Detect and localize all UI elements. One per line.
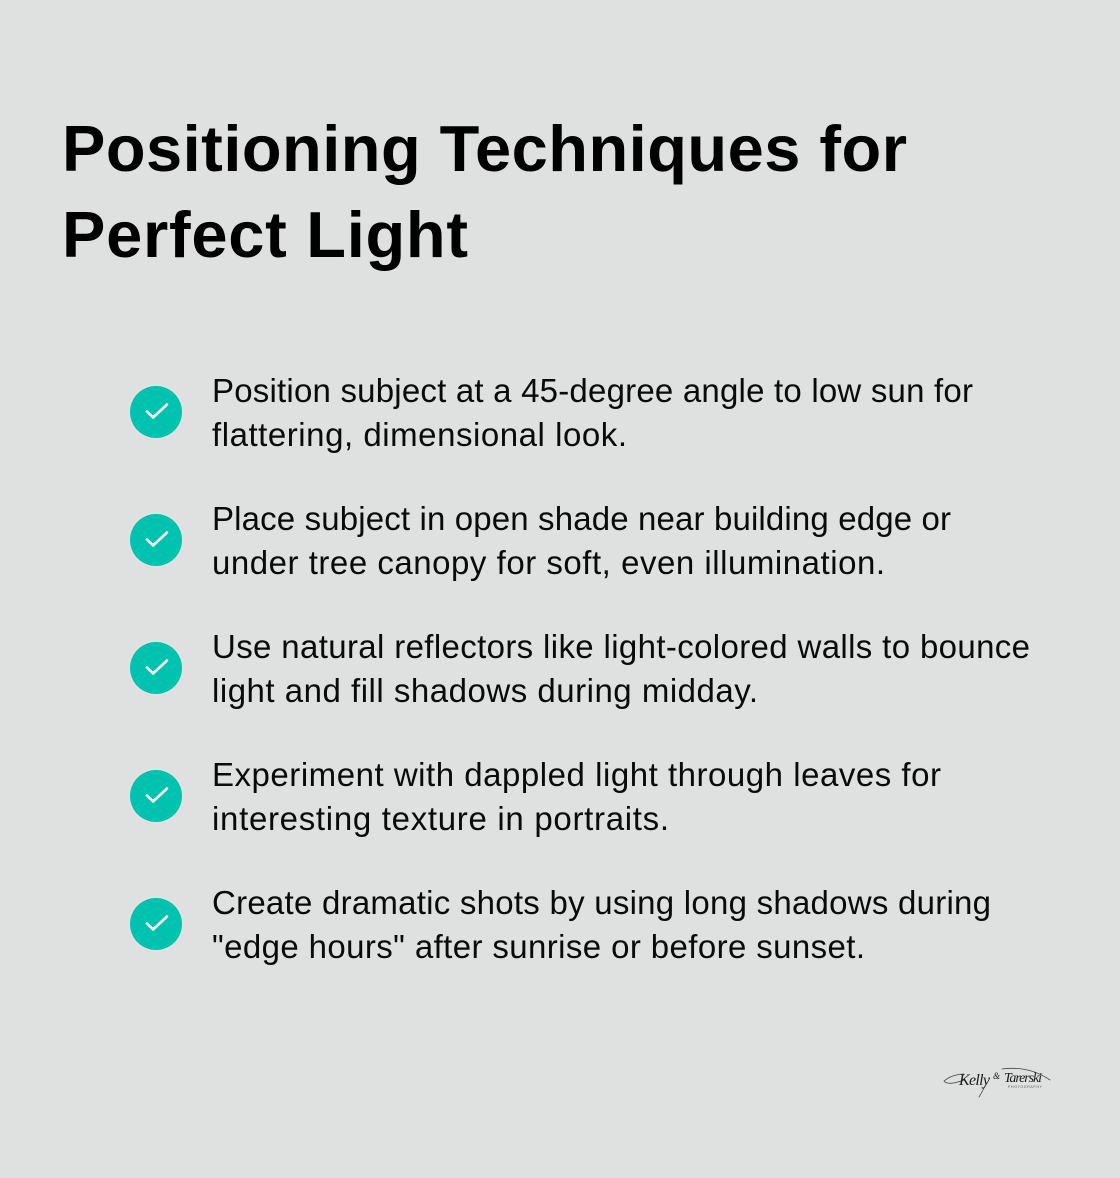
icon: check 3: [130, 642, 182, 694]
text: item 3: light and fill shadows during midday.: [212, 672, 758, 709]
logo: signature: [944, 1068, 1050, 1097]
title: Perfect Light: [62, 198, 468, 271]
text: item 2: [212, 500, 951, 581]
text: item 4: Experiment with dappled light through leaves for: [212, 756, 941, 793]
text: item 5: "edge hours" after sunrise or before sunset.: [212, 928, 865, 965]
text: item 4: [212, 756, 941, 837]
title: Positioning Techniques for: [62, 112, 907, 185]
text: item 5: [212, 884, 991, 965]
logo: signature: Tarerski: [1004, 1071, 1042, 1086]
text: item 3: Use natural reflectors like light-colored walls to bounce: [212, 628, 1030, 665]
icon: check 5: [130, 898, 182, 950]
item 4: [130, 756, 941, 837]
text: item 2: under tree canopy for soft, even illumination.: [212, 544, 885, 581]
text: item 4: interesting texture in portraits.: [212, 800, 669, 837]
checklist: [130, 372, 1030, 965]
text: item 1: Position subject at a 45-degree angle to low sun for: [212, 372, 973, 409]
text: item 1: flattering, dimensional look.: [212, 416, 627, 453]
text: item 5: Create dramatic shots by using long shadows during: [212, 884, 991, 921]
icon: check 2: [130, 514, 182, 566]
text: item 3: [212, 628, 1030, 709]
icon: check 4: [130, 770, 182, 822]
item 3: [130, 628, 1030, 709]
icon: check 1: [130, 386, 182, 438]
title: [62, 112, 907, 271]
logo: signature: Kelly: [958, 1072, 991, 1089]
text: item 1: [212, 372, 973, 453]
logo: signature: PHOTOGRAPHY: [1008, 1085, 1043, 1089]
item 5: [130, 884, 991, 965]
item 1: [130, 372, 973, 453]
text: item 2: Place subject in open shade near building edge or: [212, 500, 951, 537]
item 2: [130, 500, 951, 581]
logo: signature: &: [993, 1071, 1000, 1081]
